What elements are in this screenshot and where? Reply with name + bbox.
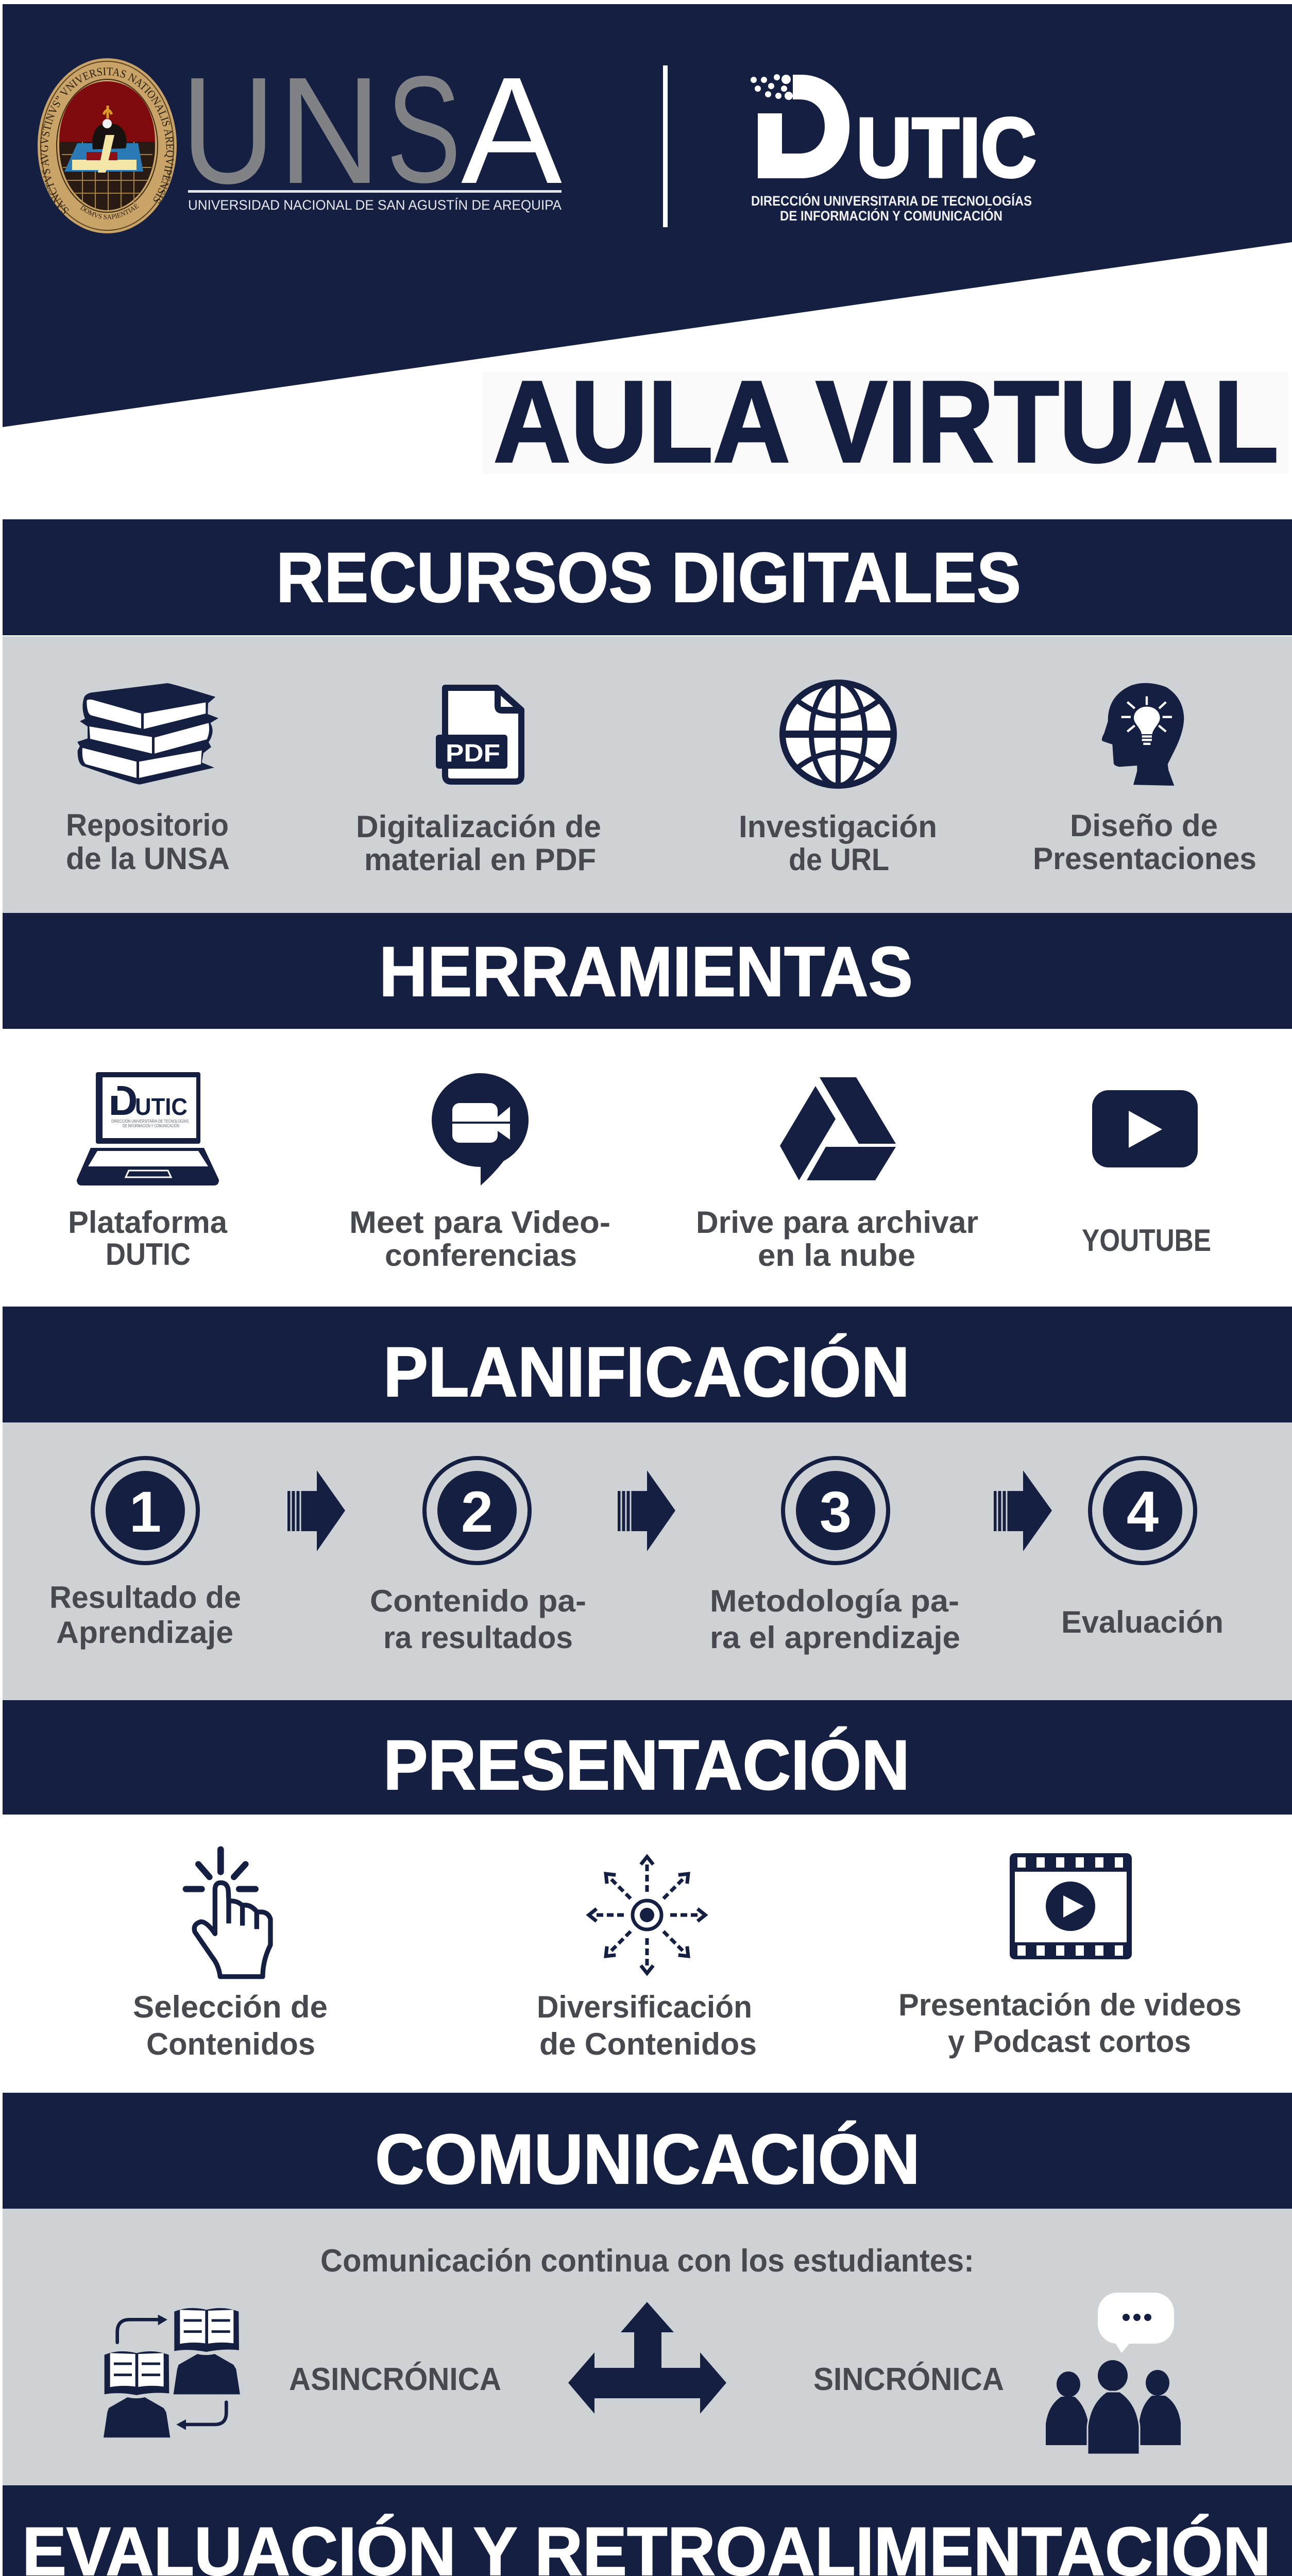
label: contenido: Contenido pa-: [370, 1584, 586, 1618]
label: resultado: [49, 1580, 241, 1650]
label: diversificación: [537, 1990, 757, 2061]
step 3 badge: 3: [820, 1480, 852, 1544]
icon: pointing hand: [186, 1850, 270, 1977]
icon: synchronous group: [1046, 2293, 1181, 2454]
arrow 3: [994, 1470, 1052, 1551]
label: digitalización: [356, 809, 601, 877]
label: youtube: YOUTUBE: [1082, 1223, 1211, 1258]
panel: presentación: [3, 1700, 1292, 2061]
label: meet: Meet para Video-: [349, 1205, 610, 1240]
heading: herramientas: HERRAMIENTAS: [379, 933, 913, 1011]
heading: recursos digitales: RECURSOS DIGITALES: [276, 538, 1021, 617]
label: diseño: Diseño de: [1070, 808, 1218, 843]
panel: evaluación y retroalimentación: [3, 2485, 1292, 2576]
icon: laptop: UTIC: [135, 1093, 188, 1120]
icon: head with light bulb: [1102, 683, 1184, 786]
logo: DUTIC: [751, 74, 1036, 195]
label: plataforma: DUTIC: [106, 1237, 191, 1272]
label: plataforma: Plataforma: [68, 1205, 228, 1240]
icon: laptop: [77, 1072, 219, 1185]
label: videos: [898, 1988, 1242, 2059]
heading: planificación: PLANIFICACIÓN: [383, 1333, 910, 1412]
panel: comunicación: [3, 2093, 1292, 2485]
label: selección: Contenidos: [146, 2027, 315, 2061]
label: repositorio: de la UNSA: [66, 841, 230, 876]
DUTIC name: DE INFORMACIÓN Y COMUNICACIÓN: [780, 208, 1002, 224]
label: resultado: Aprendizaje: [56, 1615, 233, 1650]
label: meet: [349, 1205, 610, 1273]
arrow: three-way: [568, 2302, 726, 2414]
label: selección: Selección de: [133, 1990, 328, 2024]
logo: UNSA wordmark: N: [278, 45, 381, 215]
step 2 badge: 2: [461, 1480, 493, 1544]
logo: UNSA seal: SANCTVS AVGVSTINVS” VNIVERSITAS NATIONALIS AREQVIPENSIS: [40, 67, 174, 214]
heading: comunicación: [3, 2093, 1292, 2209]
step 2 badge: [424, 1458, 530, 1563]
label: investigación: [739, 809, 937, 877]
step 4 badge: [1090, 1458, 1195, 1563]
label: metodología: Metodología pa-: [710, 1584, 959, 1618]
arrow 1: [287, 1470, 345, 1551]
step 1 badge: 1: [129, 1480, 161, 1544]
label: digitalización: material en PDF: [364, 842, 596, 877]
icon: pdf: PDF: [446, 740, 500, 767]
label: diseño: [1033, 808, 1256, 876]
heading: herramientas: [3, 913, 1292, 1029]
intro text: Comunicación continua con los estudiantes:: [320, 2243, 974, 2279]
icon: laptop: DIRECCIÓN UNIVERSITARIA DE TECNOLOGÍAS: [111, 1119, 189, 1124]
arrow 2: [618, 1470, 675, 1551]
logo: UNSA wordmark: A: [461, 45, 563, 215]
label: sincrónica: SINCRÓNICA: [813, 2362, 1004, 2397]
label: contenido: [370, 1584, 586, 1655]
icon: drive: [780, 1077, 896, 1180]
panel: recursos digitales: [3, 519, 1292, 913]
logo: UNSA seal: DOMVS SAPIENTIAE: [80, 204, 139, 219]
heading: presentación: [3, 1700, 1292, 1815]
step 3 badge: [783, 1458, 888, 1563]
icon: youtube: [1092, 1090, 1198, 1167]
label: drive: Drive para archivar: [696, 1205, 978, 1240]
label: drive: en la nube: [758, 1238, 915, 1273]
label: asincrónica: ASINCRÓNICA: [289, 2362, 501, 2397]
label: resultado: Resultado de: [49, 1580, 241, 1615]
label: diversificación: Diversificación: [537, 1990, 752, 2024]
heading: presentación: PRESENTACIÓN: [383, 1726, 910, 1805]
logo: DUTIC: UTIC: [856, 100, 1036, 195]
label: meet: conferencias: [385, 1238, 577, 1273]
label: selección: [133, 1990, 328, 2061]
label: contenido: ra resultados: [383, 1620, 573, 1655]
label: videos: Presentación de videos: [898, 1988, 1242, 2022]
icon: meet: [432, 1073, 529, 1185]
step 4 badge: 4: [1127, 1480, 1159, 1544]
icon: video film: [1010, 1853, 1132, 1959]
heading: recursos digitales: [3, 519, 1292, 635]
icon: globe: [783, 683, 894, 786]
label: repositorio: [66, 808, 230, 876]
label: digitalización: Digitalización de: [356, 809, 601, 844]
step 1 badge: [93, 1458, 198, 1563]
icon: diversification arrows: [589, 1857, 705, 1973]
label: diseño: Presentaciones: [1033, 841, 1256, 876]
logo: UNSA wordmark: [181, 44, 563, 215]
label: metodología: ra el aprendizaje: [710, 1620, 960, 1655]
label: videos: y Podcast cortos: [948, 2024, 1191, 2059]
icon: asynchronous readers: [104, 2308, 240, 2437]
heading: evaluación: [3, 2485, 1292, 2576]
icon: books: [77, 683, 218, 785]
header panel: [3, 4, 1292, 427]
icon: laptop: DE INFORMACIÓN Y COMUNICACIÓN: [123, 1124, 179, 1128]
logo: UNSA wordmark: S: [386, 44, 461, 214]
label: diversificación: de Contenidos: [539, 2027, 757, 2061]
DUTIC name: [751, 193, 1032, 224]
label: investigación: de URL: [789, 842, 889, 877]
label: repositorio: Repositorio: [66, 808, 229, 842]
DUTIC name: DIRECCIÓN UNIVERSITARIA DE TECNOLOGÍAS: [751, 193, 1032, 209]
heading: planificación: [3, 1307, 1292, 1422]
icon: pdf: [436, 688, 521, 782]
label: drive: [696, 1205, 978, 1273]
logo: UNSA wordmark: U: [181, 45, 275, 215]
university name: UNIVERSIDAD NACIONAL DE SAN AGUSTÍN DE AREQUIPA: [188, 197, 562, 213]
label: metodología: [710, 1584, 960, 1655]
heading: comunicación: COMUNICACIÓN: [375, 2120, 920, 2199]
label: investigación: Investigación: [739, 809, 937, 844]
label: evaluación: Evaluación: [1061, 1605, 1223, 1639]
label: plataforma: [68, 1205, 228, 1272]
panel: herramientas: [3, 913, 1292, 1273]
panel: planificación: [3, 1307, 1292, 1700]
